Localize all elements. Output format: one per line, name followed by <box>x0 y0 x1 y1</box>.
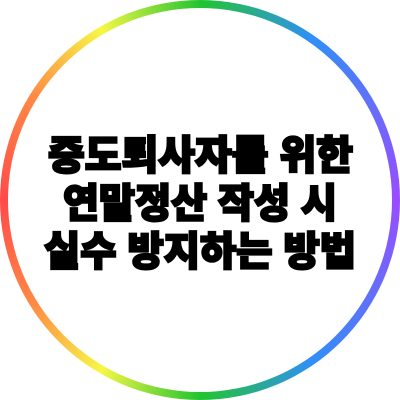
title line 2: 연말정산 작성 시 <box>63 182 337 226</box>
title line 3: 실수 방지하는 방법 <box>44 230 356 274</box>
title line 1: 중도퇴사자를 위한 <box>48 134 353 178</box>
